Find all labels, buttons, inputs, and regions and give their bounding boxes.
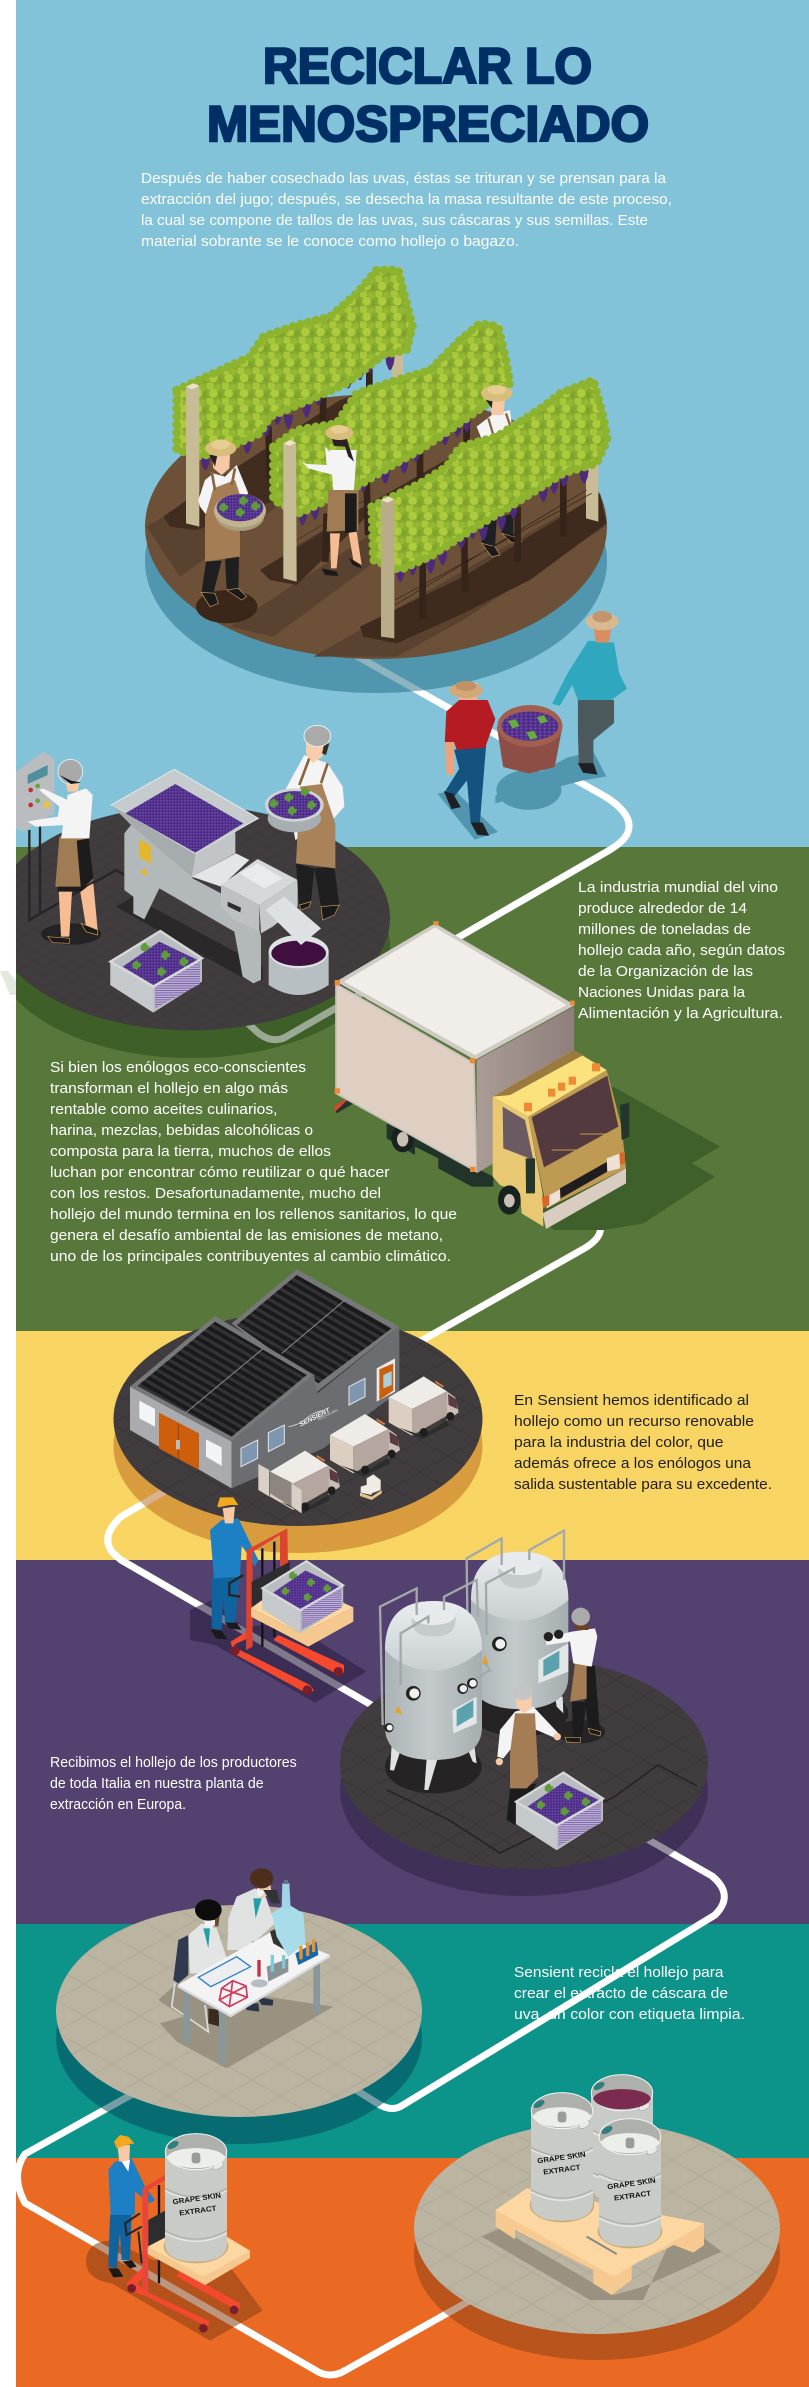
worker with bowl [265, 725, 344, 920]
logo sublabel: FOOD COLORS [317, 1408, 338, 1422]
front tank [380, 1580, 490, 1793]
barrel label line two: EXTRACT [179, 2203, 217, 2218]
small pallet of boxes [360, 1474, 382, 1500]
chute [265, 897, 321, 945]
disc shadow: barrels [414, 2148, 780, 2360]
title: RECICLAR LO [263, 38, 592, 94]
lab disc [56, 1905, 422, 2117]
back barrel with liquid [590, 2075, 654, 2204]
molecule [219, 1981, 247, 2007]
crate on forklift [262, 1561, 343, 1633]
text: eco-conscious winemakers: Si bien los enólogos eco-conscientes [50, 1060, 306, 1076]
barrel label: GRAPE SKIN [537, 2150, 586, 2165]
text: extraction plant [50, 1755, 297, 1813]
standing scientist [227, 1868, 275, 2012]
text: extraction plant: extracción en Europa. [50, 1797, 186, 1813]
band: sky blue [16, 0, 809, 847]
warehouse disc [114, 1312, 482, 1526]
text: extraction plant: Recibimos el hollejo de los productores [50, 1755, 297, 1771]
text: eco-conscious winemakers: rentable como aceites culinarios, [50, 1102, 278, 1118]
text: clean label color: uva, un color con etiqueta limpia. [514, 2007, 745, 2023]
chassis and rear wheel [334, 1098, 493, 1187]
illustration: barrels on pallet [482, 2075, 722, 2300]
pallet [148, 2237, 250, 2285]
forklift frame [229, 1528, 344, 1695]
delivery truck 1 with open doors [258, 1451, 340, 1513]
forklift shadow [86, 2241, 263, 2341]
disc shadow: lab [56, 1932, 422, 2144]
barrel label line two: EXTRACT [613, 2188, 652, 2203]
lab shadow [158, 1983, 333, 2068]
notebook [198, 1957, 251, 1987]
worker with grape basin [198, 439, 266, 607]
control panel [16, 752, 124, 920]
cargo box [336, 923, 575, 1173]
lab table [178, 1932, 330, 2063]
text: eco-conscious winemakers: uno de los principales contribuyentes al cambio climático. [50, 1249, 451, 1265]
vine row 2 [273, 323, 510, 582]
band: purple [16, 1560, 809, 1924]
worker picking grapes [302, 425, 362, 576]
text: Sensient renewable resource [514, 1393, 772, 1493]
text: eco-conscious winemakers: genera el desafío ambiental de las emisiones de metano, [50, 1228, 443, 1244]
back roof [232, 1269, 399, 1392]
press shadow bleed in margin [0, 971, 16, 995]
panel: workers carrying basket [438, 611, 627, 840]
wooden pallet [496, 2188, 704, 2295]
vine row 1 [177, 267, 413, 527]
text: introduction [141, 171, 672, 250]
barrel front [598, 2119, 662, 2248]
microscope [263, 1880, 306, 1957]
white left margin [0, 0, 16, 2387]
text: eco-conscious winemakers: luchan por encontrar cómo reutilizar o qué hacer [50, 1165, 390, 1181]
text: Sensient renewable resource: además ofrece a los enólogos una [514, 1456, 752, 1472]
disc shadow: vineyard [145, 429, 607, 693]
text: eco-conscious winemakers: hollejo del mundo termina en los rellenos sanitarios, lo que [50, 1207, 457, 1223]
vineyard soil disc [145, 393, 607, 659]
text: introduction: material sobrante se le conoce como hollejo o bagazo. [141, 234, 519, 250]
worker in teal shirt [552, 611, 627, 775]
front roof [130, 1316, 314, 1442]
text: introduction: extracción del jugo; después, se desecha la masa resultante de este proceso, [141, 192, 672, 208]
back tank [467, 1531, 568, 1737]
band: yellow [16, 1331, 809, 1560]
logo on wall: SENSIENT [298, 1407, 332, 1428]
worker at front tank [496, 1685, 561, 1825]
text: Sensient renewable resource: En Sensient hemos identificado al [514, 1393, 749, 1409]
worker at back tank [544, 1608, 605, 1743]
text: extraction plant: de toda Italia en nuestra planta de [50, 1776, 264, 1792]
cab [493, 1050, 629, 1229]
band: orange [16, 2158, 809, 2387]
floor pipes [387, 1765, 697, 1853]
disc shadow: warehouse [114, 1339, 482, 1553]
text: world wine industry: La industria mundial del vino [578, 880, 778, 896]
title [207, 38, 649, 152]
text: clean label color: Sensient recicla el hollejo para [514, 1965, 724, 1981]
worker at control panel [28, 759, 101, 945]
crate of grapes [110, 931, 202, 1013]
text: eco-conscious winemakers: con los restos. Desafortunadamente, mucho del [50, 1186, 381, 1202]
pot of juice [269, 935, 329, 995]
barrel label line two: EXTRACT [543, 2162, 581, 2177]
delivery truck 3 [389, 1376, 459, 1439]
vine row 3 [372, 379, 607, 638]
barrel left [530, 2093, 594, 2222]
text: introduction: la cual se compone de tallos de las uvas, sus cáscaras y sus semillas. Este [141, 213, 648, 229]
basket of grapes [497, 705, 562, 773]
pallet shadow [482, 2220, 722, 2300]
tanks disc [340, 1657, 708, 1869]
illustration: warehouse with trucks [130, 1269, 459, 1513]
text: eco-conscious winemakers [50, 1060, 457, 1265]
test tubes and flask [251, 1939, 318, 1987]
text: clean label color: crear el extracto de cáscara de [514, 1986, 728, 2002]
forklift worker [108, 2135, 155, 2277]
illustration: vineyard [145, 267, 607, 659]
panel: truck [334, 921, 720, 1230]
illustration: forklift and tanks [190, 1497, 697, 1853]
text: world wine industry: Alimentación y la Agricultura. [578, 1006, 783, 1022]
delivery truck 2 [330, 1414, 400, 1477]
barrel label: GRAPE SKIN [607, 2176, 656, 2191]
text: Sensient renewable resource: hollejo como un recurso renovable [514, 1414, 754, 1430]
crate by tank [516, 1773, 603, 1850]
worker in red shirt [444, 681, 495, 836]
barrel on forklift [164, 2134, 228, 2263]
text: world wine industry: millones de toneladas de [578, 922, 751, 938]
text: eco-conscious winemakers: composta para la tierra, muchos de ellos [50, 1144, 331, 1160]
barrel label: GRAPE SKIN [172, 2191, 221, 2206]
text: world wine industry: Naciones Unidas para la [578, 985, 746, 1001]
barrels disc [414, 2122, 780, 2334]
warehouse walls [130, 1327, 399, 1488]
disc shadow: tanks [340, 1684, 708, 1896]
panel: press disc [0, 725, 390, 1030]
text: eco-conscious winemakers: transforman el hollejo en algo más [50, 1081, 288, 1097]
route line [18, 655, 724, 2375]
title: MENOSPRECIADO [207, 96, 649, 152]
forklift shadow [190, 1600, 367, 1703]
text: eco-conscious winemakers: harina, mezclas, bebidas alcohólicas o [50, 1123, 313, 1139]
text: Sensient renewable resource: para la industria del color, que [514, 1435, 724, 1451]
worker behind third row upper body [477, 385, 513, 443]
illustration: lab [158, 1868, 333, 2068]
grape press machine [111, 769, 298, 983]
text: clean label color [514, 1965, 745, 2023]
worker shadow and basket shadow [438, 752, 606, 840]
seated scientist [172, 1899, 227, 2032]
illustration: forklift with barrel [86, 2134, 263, 2341]
forklift frame [125, 2175, 240, 2333]
text: world wine industry: produce alrededor de 14 [578, 901, 747, 917]
text: world wine industry: de la Organización de las [578, 964, 753, 980]
forklift worker [210, 1497, 258, 1639]
text: world wine industry [578, 880, 785, 1022]
text: Sensient renewable resource: salida sustentable para su excedente. [514, 1477, 772, 1493]
band: green [16, 847, 809, 1331]
disc shadow: press [0, 834, 390, 1058]
pallet [251, 1597, 353, 1647]
worker legs behind third row [482, 513, 522, 557]
truck ground shadow [493, 1087, 720, 1230]
orange marker lights [335, 921, 600, 1172]
text: world wine industry: hollejo cada año, según datos [578, 943, 785, 959]
text: introduction: Después de haber cosechado las uvas, éstas se trituran y se prensan para la [141, 171, 667, 187]
band: teal [16, 1924, 809, 2158]
press disc floor [0, 806, 390, 1030]
